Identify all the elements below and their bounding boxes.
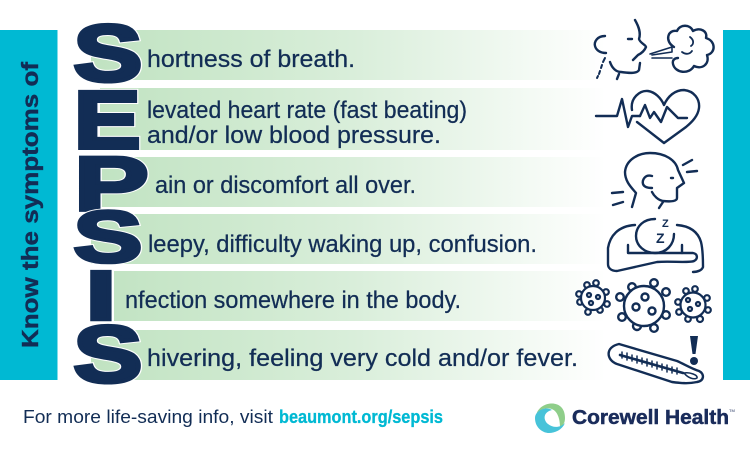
exclamation mark	[690, 336, 698, 365]
icon: breath	[595, 20, 714, 79]
footer call to action: beaumont.org/sepsis	[279, 407, 443, 427]
SEPSIS acrostic letters: S	[74, 8, 142, 98]
right teal side panel	[723, 30, 750, 380]
SEPSIS acrostic letters: E	[74, 74, 141, 166]
SEPSIS acrostic letters: P	[74, 142, 149, 227]
icon: virus particles	[576, 279, 711, 332]
SEPSIS acrostic letters: S	[74, 8, 142, 98]
side heading: Know the symptoms of	[17, 62, 43, 348]
logo mark	[535, 404, 565, 433]
footer call to action	[23, 407, 443, 427]
SEPSIS acrostic letters: I	[86, 258, 116, 334]
icon: sleeping person	[608, 218, 703, 272]
SEPSIS acrostic letters: E	[74, 74, 141, 166]
logo: Corewell Health: Corewell Health	[572, 407, 729, 429]
symptom text rows: and/or low blood pressure.	[147, 122, 441, 149]
logo: Corewell Health	[535, 404, 735, 433]
icon: sleeping person: Z	[656, 230, 665, 246]
symptom text rows	[125, 46, 578, 372]
symptom text rows: levated heart rate (fast beating)	[147, 97, 467, 124]
icon: heart with pulse	[596, 90, 699, 143]
row bars	[91, 30, 606, 380]
symptom text rows: leepy, difficulty waking up, confusion.	[148, 231, 537, 258]
SEPSIS acrostic letters: P	[74, 142, 149, 227]
left teal side panel	[0, 30, 58, 380]
SEPSIS acrostic letters: S	[74, 309, 142, 399]
virus left	[576, 280, 610, 315]
symptom text rows: nfection somewhere in the body.	[125, 287, 461, 314]
icon: head with pain	[612, 153, 697, 208]
logo: Corewell Health: TM	[729, 408, 735, 413]
SEPSIS acrostic letters	[74, 8, 149, 399]
SEPSIS acrostic letters: S	[74, 309, 142, 399]
icon: sleeping person: Z	[662, 218, 669, 230]
symptom text rows: hortness of breath.	[147, 46, 355, 73]
SEPSIS acrostic letters: S	[74, 196, 142, 277]
symptom text rows: ain or discomfort all over.	[155, 172, 416, 199]
symptom text rows: hivering, feeling very cold and/or fever.	[147, 345, 578, 372]
virus right	[675, 286, 711, 322]
virus center	[616, 279, 670, 332]
SEPSIS acrostic letters: S	[74, 196, 142, 277]
footer call to action: For more life-saving info, visit	[23, 407, 273, 427]
icon: thermometer with alert	[609, 336, 703, 383]
